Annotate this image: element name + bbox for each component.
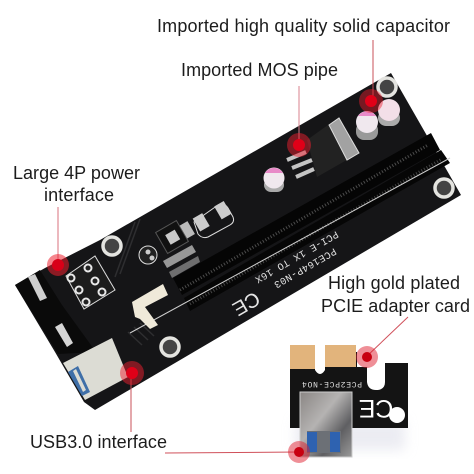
slot latch [132, 284, 168, 329]
board body [15, 73, 461, 410]
board silkscreen text: PCE164P-N03 [271, 245, 338, 289]
marker: capacitor [359, 89, 383, 113]
callout line: capacitor [372, 40, 374, 100]
card hole [389, 407, 405, 423]
capacitors [264, 99, 400, 192]
4P power header [66, 256, 115, 309]
board silkscreen text [228, 228, 340, 320]
label: gold: High gold plated [328, 273, 460, 293]
CE mark: CE [359, 394, 393, 422]
callout line: USB to card [165, 452, 299, 453]
label: USB: USB3.0 interface [30, 432, 167, 452]
gold fingers [290, 345, 356, 374]
mounting holes [103, 78, 453, 356]
card shadow [295, 420, 405, 450]
black power connector [15, 270, 96, 354]
marker: USB [120, 361, 144, 385]
label: power: interface [44, 185, 114, 205]
large USB port [63, 338, 128, 400]
board silkscreen text: CE [228, 287, 264, 320]
small USB shield [300, 392, 352, 457]
marker: power [47, 254, 69, 276]
callout line: gold [366, 317, 408, 357]
card model text: PCE2PCE-NO4 [302, 379, 362, 388]
riser board [15, 73, 461, 410]
label: MOS: Imported MOS pipe [181, 60, 338, 80]
label: gold: PCIE adapter card [321, 296, 470, 316]
label: power: Large 4P power [13, 163, 140, 183]
label: power [13, 163, 140, 205]
board traces [115, 219, 154, 345]
callout line: power [57, 207, 59, 265]
board silkscreen text: PCI-E 1X TO 16X [253, 228, 340, 284]
callout line: MOS [298, 86, 300, 145]
adapter card [290, 345, 408, 457]
PCIe slot [130, 133, 450, 333]
marker: MOS [287, 133, 311, 157]
label: gold [321, 273, 470, 316]
label: capacitor: Imported high quality solid capacitor [157, 16, 450, 36]
MOS regulator [287, 117, 359, 177]
callout line: USB [130, 373, 132, 432]
small regulator area [139, 201, 234, 278]
marker: small USB [288, 441, 310, 463]
card PCB [290, 352, 408, 428]
marker: gold [356, 346, 378, 368]
